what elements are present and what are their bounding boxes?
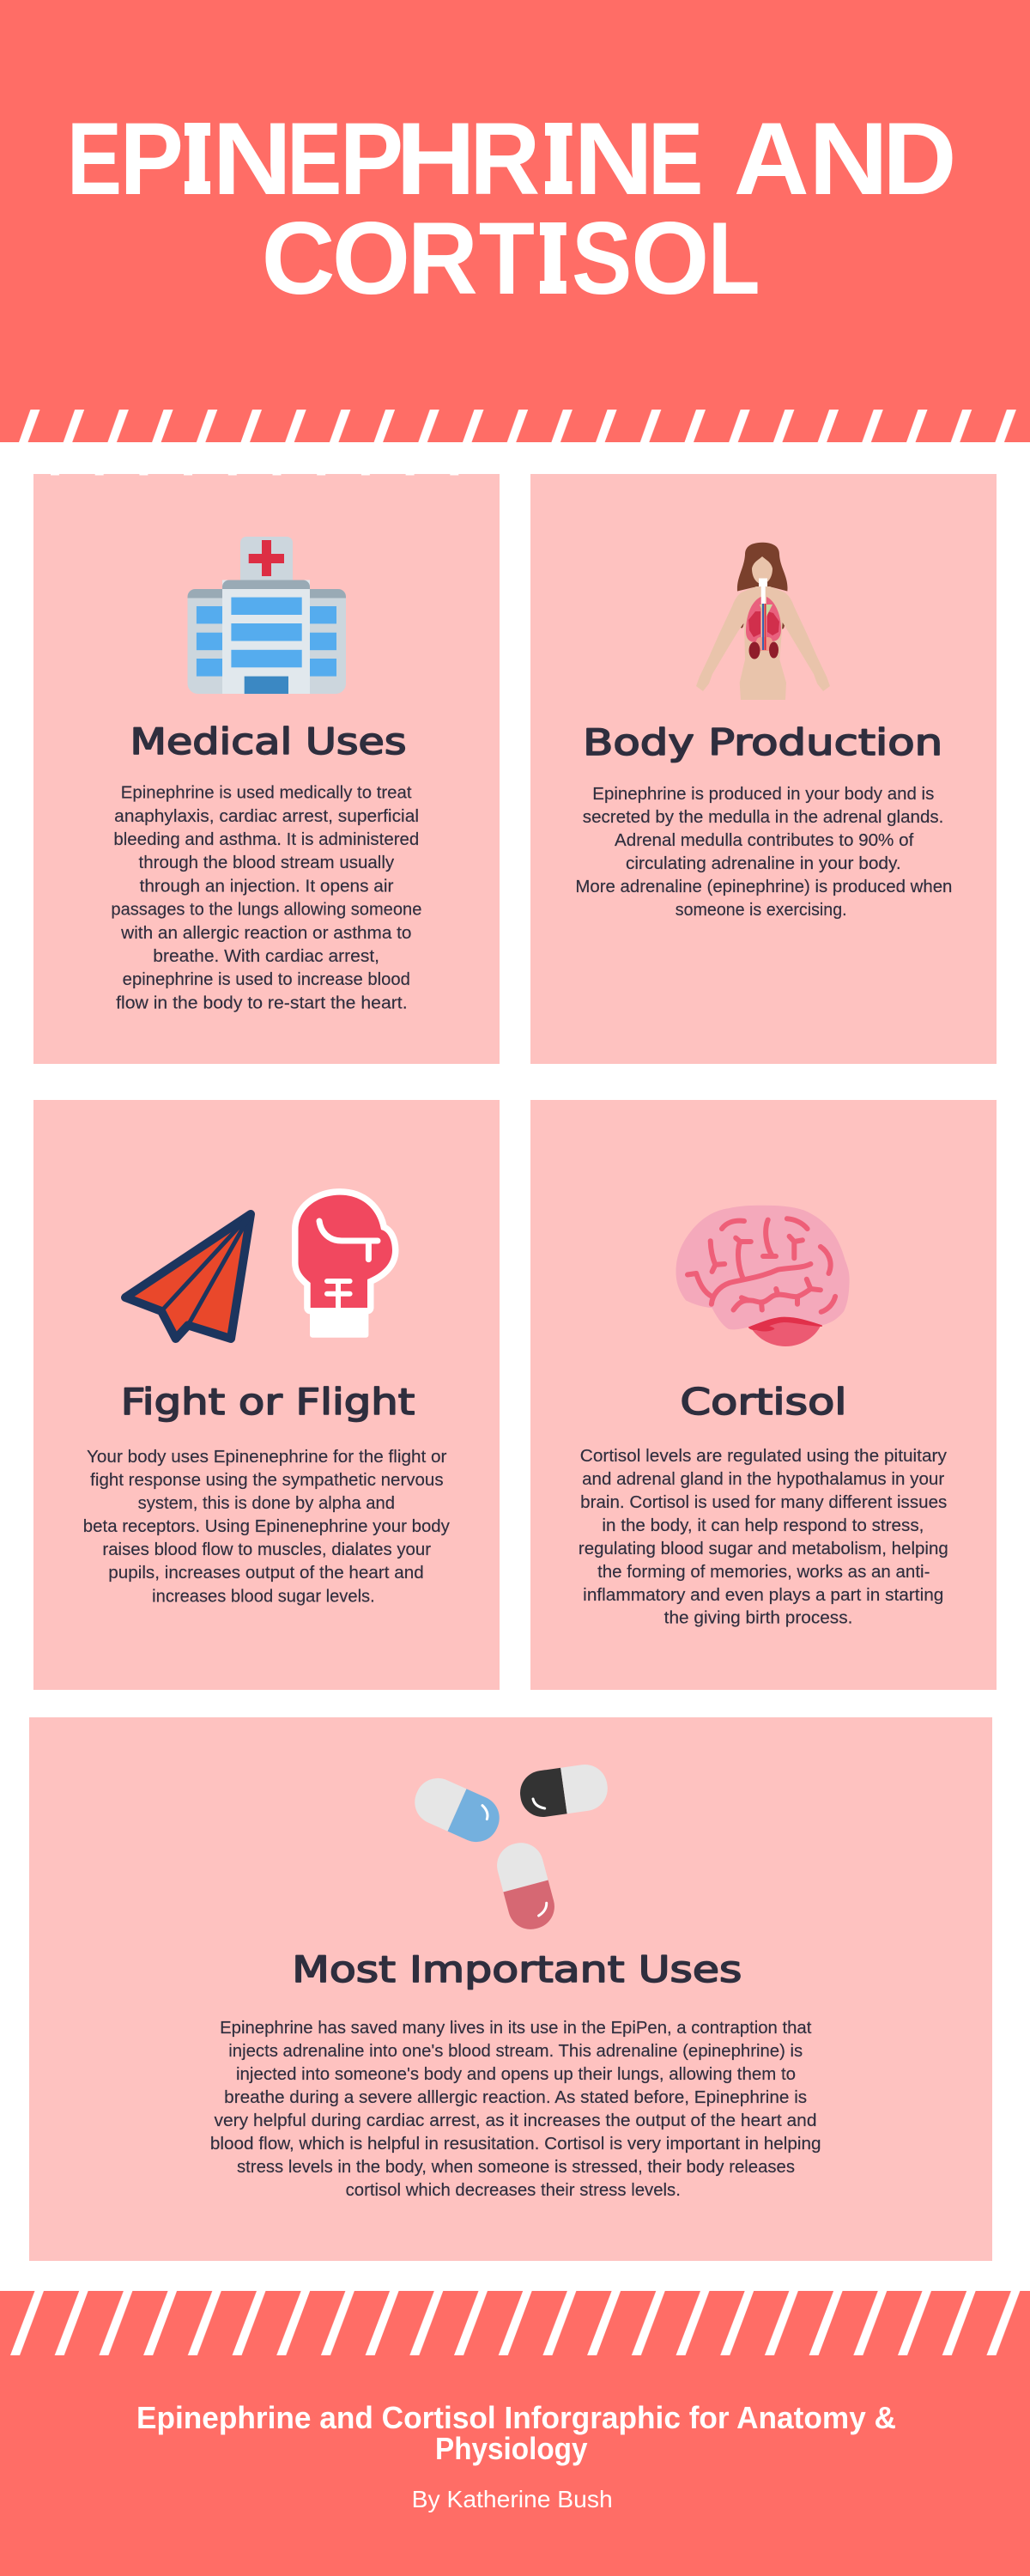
title: I [182,101,212,216]
text: medical uses: flow in the body to re-start the heart. [116,994,408,1013]
text: fight or flight: Your body uses Epinenephrine for the flight or [87,1448,447,1467]
text: fight or flight: fight response using the sympathetic nervous [90,1471,444,1490]
footer banner [0,2291,1030,2576]
heading: body production: Body Production [583,721,942,763]
icon: hospital [187,537,346,694]
text: medical uses: through an injection. It opens air [140,877,394,896]
text: medical uses: passages to the lungs allowing someone [111,901,421,920]
text: most important uses: blood flow, which is helpful in resusitation. Cortisol is very important in helping [210,2135,821,2154]
text: fight or flight [83,1448,450,1606]
panel: fight or flight [33,1100,500,1690]
title: E [67,101,122,216]
footer title: Physiology [435,2431,587,2466]
text: body production: secreted by the medulla in the adrenal glands. [583,808,943,827]
text: cortisol: brain. Cortisol is used for many different issues [580,1493,947,1512]
text: medical uses: bleeding and asthma. It is administered [113,830,419,849]
text: medical uses: breathe. With cardiac arrest, [153,947,379,966]
heading: most important uses: Most Important Uses [292,1948,742,1990]
title: P [340,101,403,216]
text: most important uses: injects adrenaline into one's blood stream. This adrenaline (epinephrine) is [228,2042,803,2061]
icon: blue pill [415,1777,500,1843]
panel: cortisol [530,1100,997,1690]
title: S [572,201,632,316]
icon: brain [676,1206,850,1346]
title: O [332,201,410,316]
icon: black pill [520,1765,608,1817]
text: body production: Epinephrine is produced in your body and is [592,785,934,804]
panel: medical uses [33,474,500,1064]
footer author: By Katherine Bush [412,2486,613,2512]
title: D [882,101,956,216]
heading: medical uses: Medical Uses [130,720,407,762]
title: O [631,201,709,316]
title: L [708,201,760,316]
text: cortisol: and adrenal gland in the hypothalamus in your [582,1470,945,1489]
text: most important uses [210,2019,821,2200]
text: fight or flight: beta receptors. Using Epinenephrine your body [83,1517,450,1536]
header banner [0,0,1030,442]
text: medical uses: anaphylaxis, cardiac arrest, superficial [114,807,419,826]
panel: most important uses [29,1717,992,2261]
title: I [537,201,567,316]
text: cortisol: inflammatory and even plays a part in starting [583,1586,943,1605]
title: R [408,201,478,316]
text: most important uses: breathe during a severe alllergic reaction. As stated before, Epinephrine is [224,2088,807,2107]
icon: human body with organs [696,543,830,700]
icon: red pill [497,1843,554,1929]
text: cortisol: regulating blood sugar and metabolism, helping [579,1540,948,1558]
title: N [573,101,653,216]
text: cortisol [579,1447,948,1628]
title: N [809,101,888,216]
text: cortisol: in the body, it can help respond to stress, [602,1516,924,1535]
text: body production: Adrenal medulla contributes to 90% of [615,831,914,850]
text: medical uses: epinephrine is used to increase blood [123,970,410,989]
text: fight or flight: increases blood sugar levels. [152,1587,375,1606]
title: E [648,101,703,216]
text: most important uses: injected into someone's body and opens up their lungs, allowing them to [236,2065,796,2084]
icon: paper plane [125,1214,251,1339]
text: cortisol: the giving birth process. [664,1609,852,1628]
title: E [287,101,342,216]
title: P [120,101,184,216]
text: most important uses: very helpful during cardiac arrest, as it increases the output of the heart and [215,2111,817,2130]
text: body production: circulating adrenaline in your body. [626,854,901,873]
text: fight or flight: system, this is done by alpha and [138,1494,395,1513]
title: H [396,101,476,216]
text: body production: someone is exercising. [676,901,847,920]
text: fight or flight: raises blood flow to muscles, dialates your [102,1540,431,1559]
title: C [262,201,335,316]
text: fight or flight: pupils, increases output of the heart and [108,1564,424,1583]
text: most important uses: Epinephrine has saved many lives in its use in the EpiPen, a contraption that [220,2019,812,2038]
text: most important uses: stress levels in the body, when someone is stressed, their body releases [237,2158,795,2177]
text: body production: More adrenaline (epinephrine) is produced when [575,878,952,896]
text: medical uses: Epinephrine is used medically to treat [121,784,412,803]
title: T [479,201,535,316]
title [67,101,956,316]
icon: boxing glove [299,1195,392,1338]
title: A [734,101,809,216]
title: I [543,101,573,216]
text: medical uses: with an allergic reaction or asthma to [120,924,412,943]
text: most important uses: cortisol which decreases their stress levels. [346,2181,681,2200]
text: cortisol: Cortisol levels are regulated using the pituitary [580,1447,947,1466]
text: medical uses [111,784,421,1013]
footer title [136,2400,896,2466]
text: body production [575,785,952,920]
footer title: Epinephrine and Cortisol Inforgraphic for Anatomy & [136,2400,896,2435]
text: cortisol: the forming of memories, works as an anti- [597,1563,930,1582]
heading: cortisol: Cortisol [680,1381,846,1423]
heading: fight or flight: Fight or Flight [121,1381,415,1423]
text: medical uses: through the blood stream usually [139,854,394,872]
title: N [212,101,292,216]
title: R [470,101,540,216]
panel: body production [530,474,997,1064]
